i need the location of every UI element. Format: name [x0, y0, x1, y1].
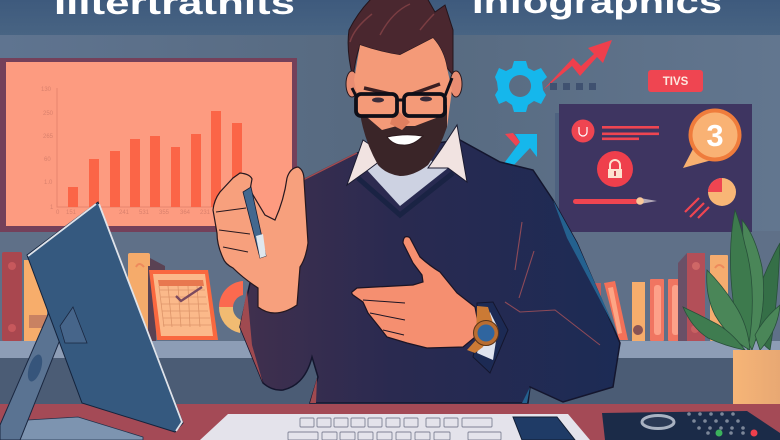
chart axis labels: 241: [119, 210, 130, 216]
donut chart: [219, 281, 243, 333]
body rim light: [310, 378, 317, 403]
tag: TIVS: TIVS: [663, 76, 689, 88]
finger creases: [363, 300, 405, 335]
chart axis labels: 231: [200, 210, 211, 216]
sleeve creases: [505, 222, 600, 345]
monitor base: [20, 417, 143, 440]
hair: [348, 0, 453, 78]
icon: padlock: [597, 151, 633, 187]
glasses: [356, 94, 445, 116]
check mark: [176, 287, 202, 301]
monitor stand arm: [0, 307, 73, 440]
chart axis labels: 1: [50, 205, 54, 211]
chart axis labels: 151: [66, 210, 77, 216]
panel: bar chart screen: [0, 58, 297, 232]
chart axis labels: 0: [56, 210, 60, 216]
icon: calendar: [149, 270, 218, 340]
left books: [2, 252, 165, 341]
left hand holding pen: [213, 167, 308, 313]
body right edge: [522, 387, 530, 403]
sweater highlights: [553, 200, 618, 335]
button grid: [687, 412, 745, 435]
sleeve cuff: [473, 302, 508, 373]
glasses arms: [352, 78, 452, 100]
ears: [346, 71, 358, 97]
eyebrows: [364, 84, 440, 94]
plant: [683, 210, 780, 350]
pen: [243, 187, 266, 258]
shoulder rim light: [303, 153, 357, 180]
progress squares: [550, 83, 596, 90]
icon: red growth arrow: [543, 40, 612, 90]
pen tip: [256, 234, 266, 258]
text lines: [602, 126, 659, 140]
icon: gear: [495, 61, 547, 112]
smile with teeth: [387, 135, 423, 145]
chart axis labels: [41, 87, 211, 216]
panel: infographic board: [555, 104, 752, 232]
icon: blue arrow: [502, 133, 537, 166]
person: [213, 0, 620, 403]
beard: [360, 105, 447, 176]
chart axes: [57, 88, 250, 207]
shelf: [0, 341, 780, 358]
key rows: [288, 418, 501, 440]
face: [354, 38, 452, 176]
speech bubble with number: 3: [706, 118, 724, 153]
plant pot: [733, 350, 780, 404]
chart axis labels: 531: [139, 210, 150, 216]
hair strands: [350, 4, 434, 42]
finger lines: [216, 208, 250, 252]
chart axis labels: 364: [180, 210, 191, 216]
right hand pointing: [352, 237, 480, 348]
chart axis labels: 60: [44, 157, 51, 163]
under-shelf wall: [0, 358, 780, 405]
monitor light edge: [28, 204, 182, 431]
remote control: [602, 411, 780, 440]
arm rim light: [240, 290, 263, 383]
chart axis labels: 250: [43, 111, 54, 117]
sweater v-neck band: [358, 173, 453, 215]
right books: [593, 253, 728, 341]
monitor: [0, 202, 183, 440]
tag: TIVS: [648, 70, 703, 92]
phone: [513, 417, 575, 440]
shirt cuff: [477, 312, 498, 360]
decorative slashes icon: [685, 198, 709, 218]
eyes: [372, 96, 432, 102]
nose: [390, 108, 410, 130]
wristwatch: [467, 306, 498, 353]
chart axis labels: 130: [41, 87, 52, 93]
stand cable hole: [25, 353, 45, 383]
monitor hinge: [60, 307, 87, 343]
chart axis labels: 265: [43, 134, 54, 140]
shelf backing: [0, 231, 780, 341]
slider: [573, 197, 657, 205]
collar: [347, 125, 467, 185]
desk surface: [0, 404, 780, 440]
green button: [716, 430, 722, 436]
shirt: [367, 160, 448, 206]
monitor back: [27, 202, 183, 432]
red button: [750, 430, 758, 436]
keyboard: [200, 414, 590, 440]
chart bars: [68, 111, 242, 207]
chart axis labels: 1.0: [44, 180, 53, 186]
pie chart: [708, 178, 736, 206]
speech bubble with number: [683, 108, 742, 168]
sweater body: [240, 140, 620, 403]
title band: [0, 0, 780, 35]
chart axis labels: 355: [159, 210, 170, 216]
knob: [642, 416, 674, 428]
icon: clock badge: [572, 120, 594, 142]
